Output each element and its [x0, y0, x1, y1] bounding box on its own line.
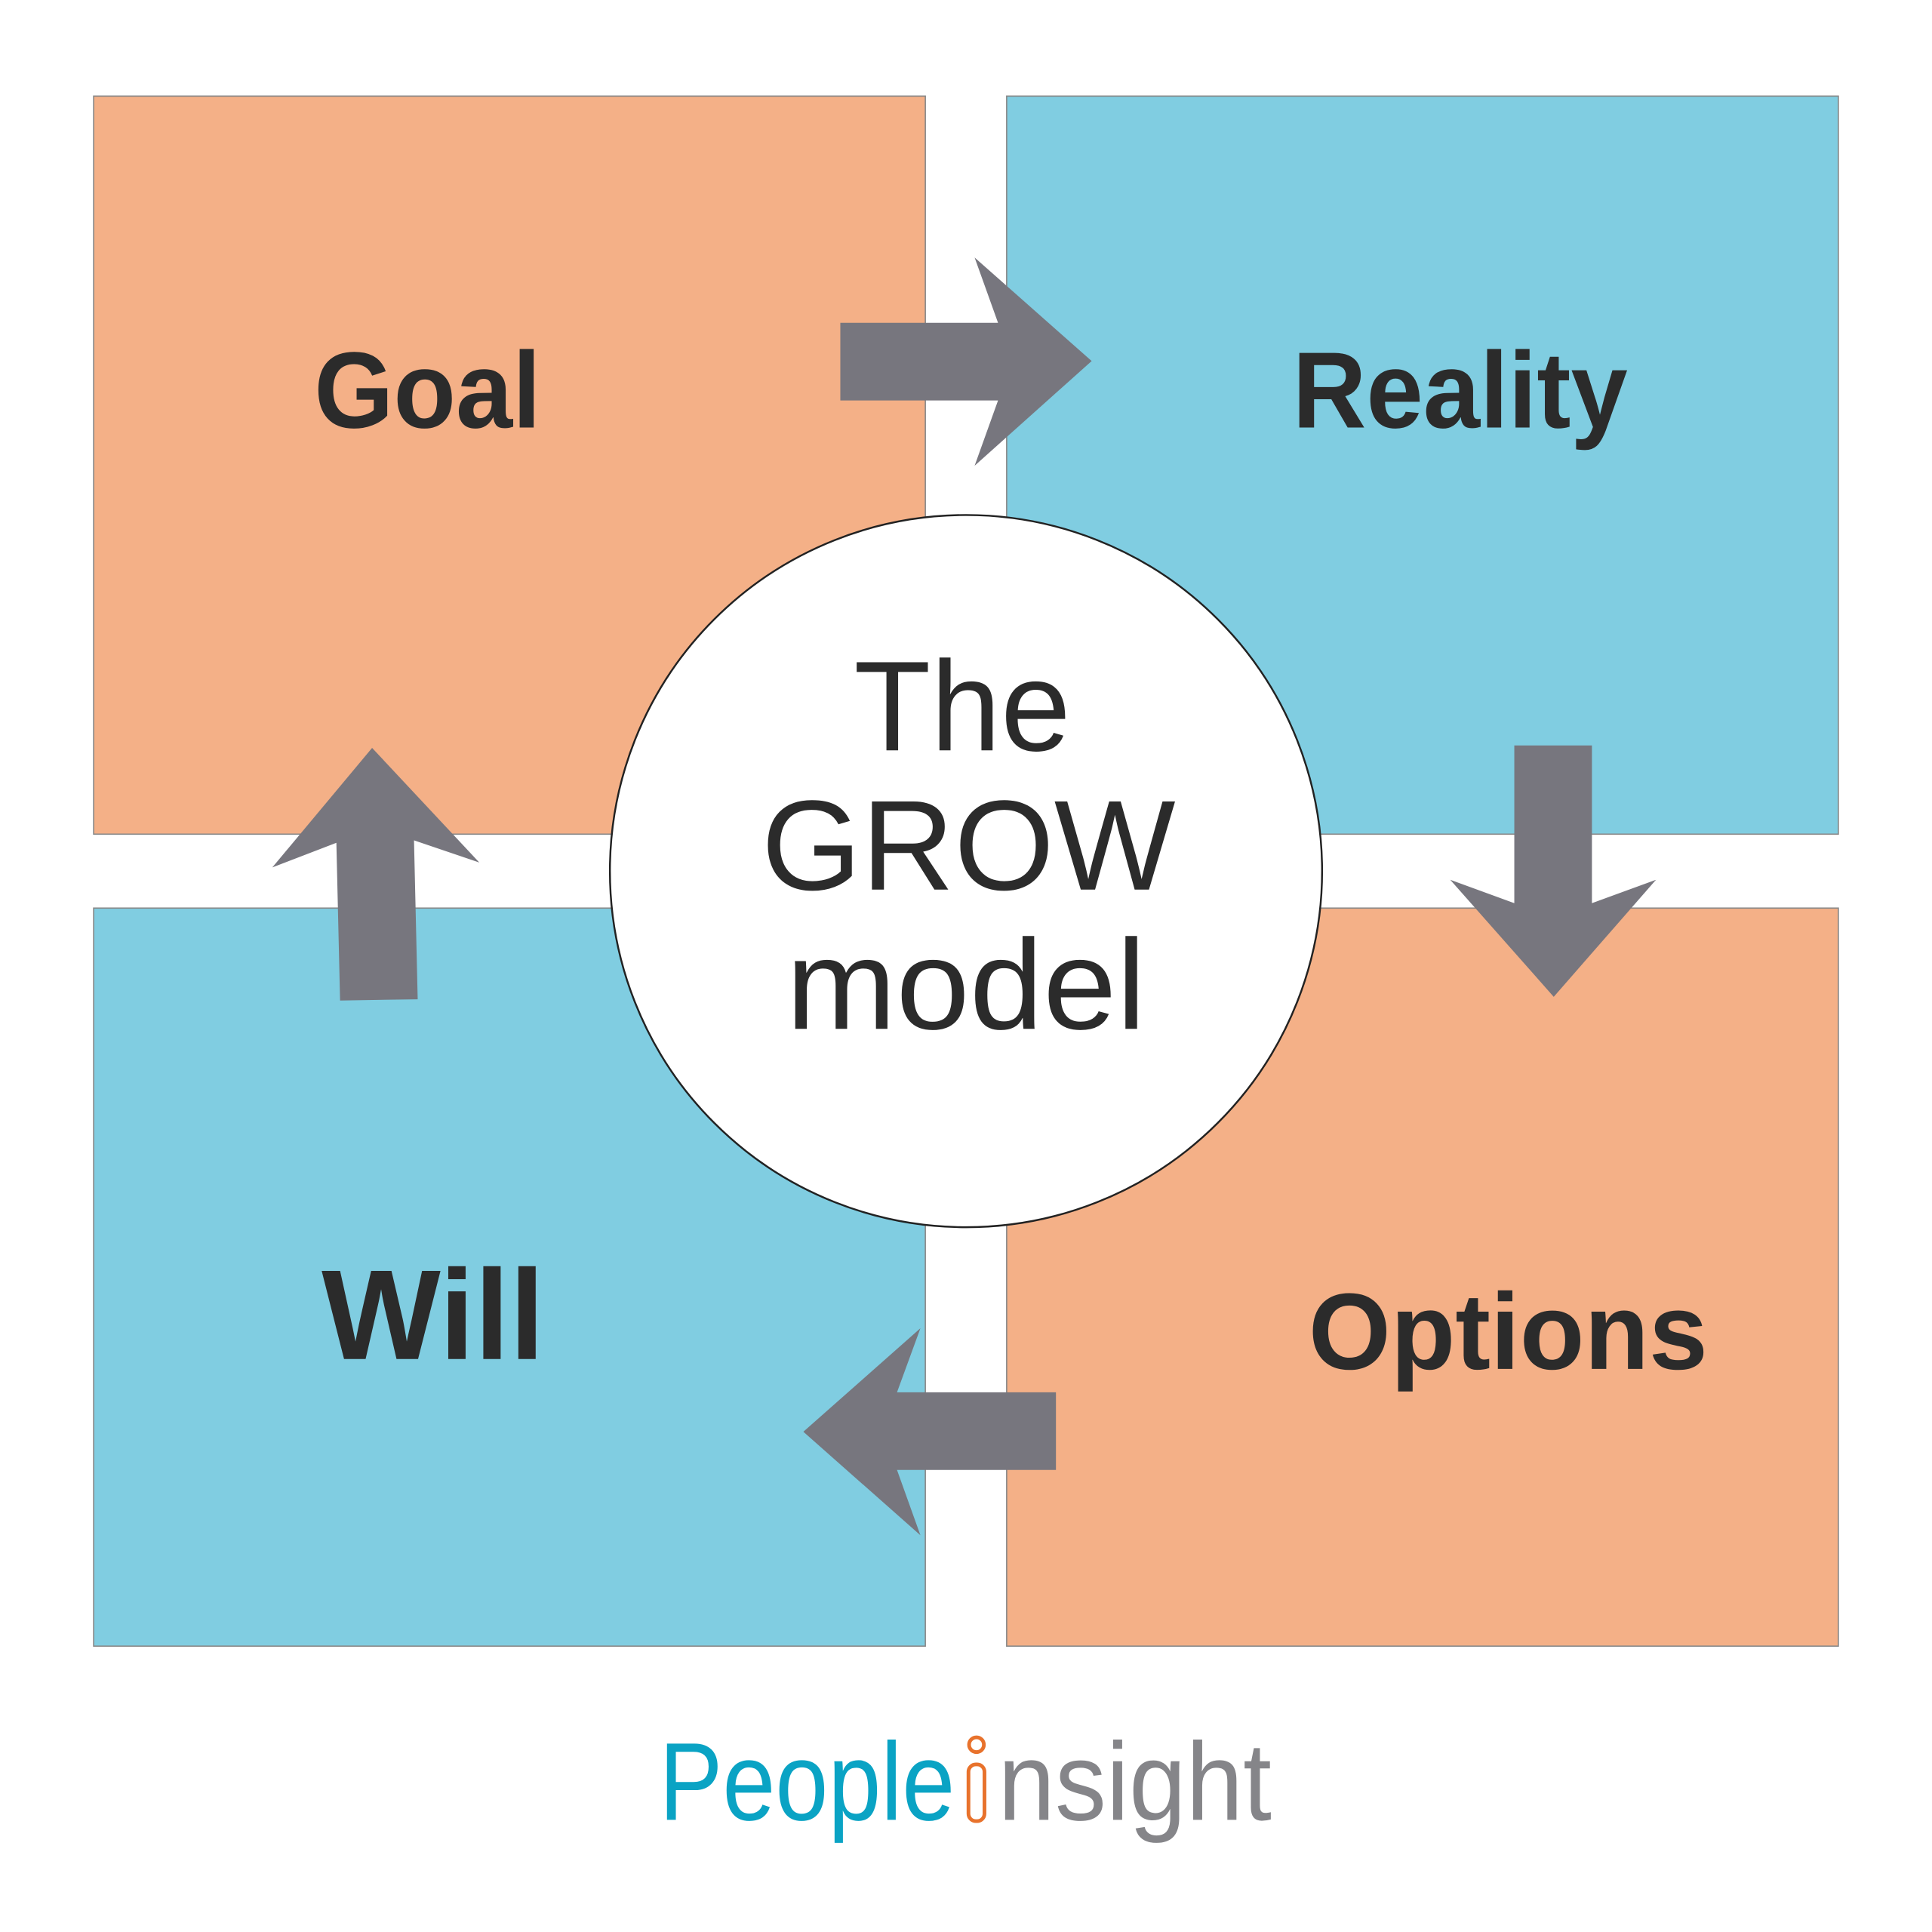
panel: goal [94, 96, 925, 834]
heading: Will: Will [321, 1243, 545, 1386]
arrow: reality to options [1451, 746, 1656, 997]
arrow: options to will [803, 1328, 1056, 1535]
title: The GROW model: The [854, 634, 1071, 777]
icon: orange i person [968, 1737, 984, 1821]
arrow: will to goal [272, 748, 479, 1001]
logo: PeopleInsight [659, 1720, 1272, 1844]
panel: will [94, 908, 925, 1646]
logo: PeopleInsight: nsight [998, 1720, 1272, 1844]
panel: reality [1007, 96, 1838, 834]
heading: Options: Options [1309, 1272, 1708, 1392]
center circle with title [610, 515, 1322, 1227]
arrow: goal to reality [840, 257, 1092, 466]
heading: Goal: Goal [314, 331, 541, 451]
heading: Reality: Reality [1293, 331, 1628, 451]
panel: options [1007, 908, 1838, 1646]
logo: PeopleInsight: People [659, 1720, 955, 1844]
title: The GROW model [761, 634, 1176, 1056]
title: The GROW model: model [786, 912, 1146, 1056]
title: The GROW model: GROW [761, 774, 1176, 917]
